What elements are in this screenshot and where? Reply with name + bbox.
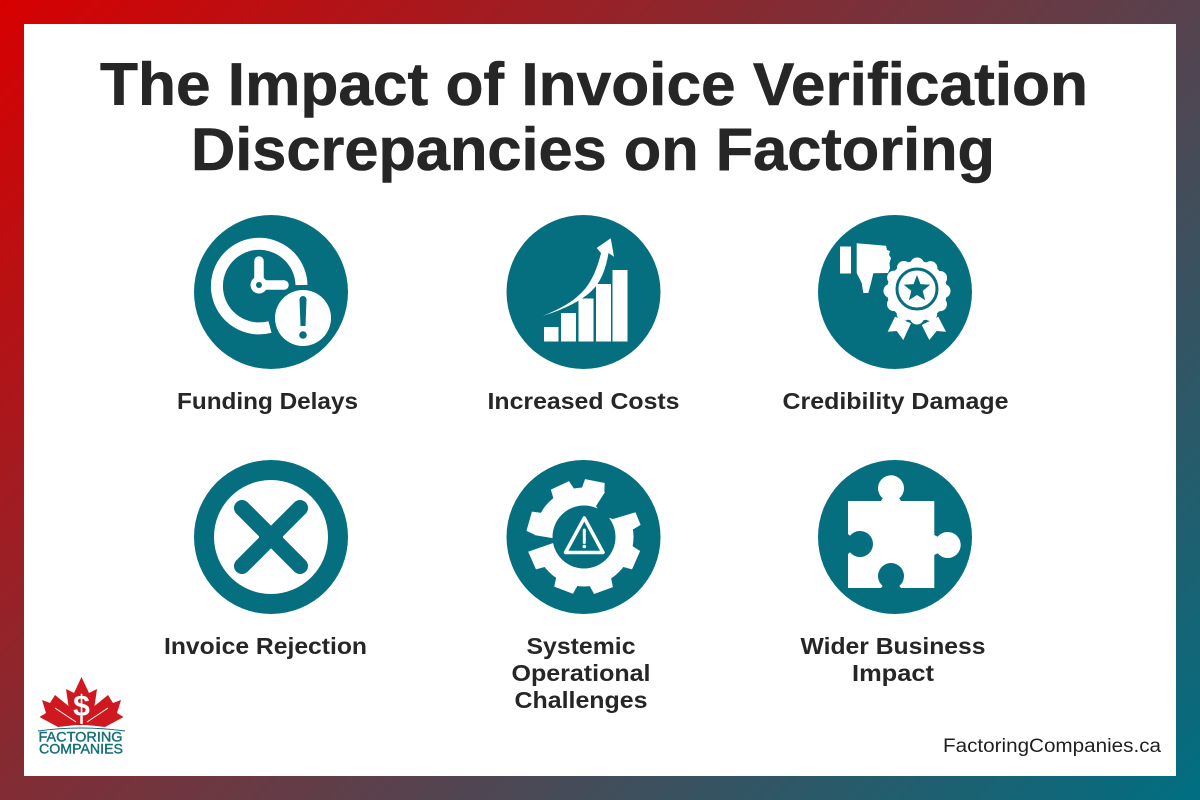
label: invoice rejection: Invoice Rejection (164, 633, 367, 659)
icon: credibility damage (818, 215, 972, 369)
icon: systemic operational gear (506, 460, 660, 614)
icon: funding delays clock (194, 215, 348, 369)
icon: wider business impact puzzle (818, 460, 972, 614)
label: credibility damage: Credibility Damage (782, 388, 1008, 414)
label: wider business impact: Wider Business (800, 633, 986, 659)
title (100, 51, 1088, 183)
logo wordmark: COMPANIES (39, 742, 123, 756)
label: systemic operational challenges: Systemic (526, 633, 636, 659)
logo wordmark: FACTORING (38, 730, 123, 744)
label: funding delays: Funding Delays (177, 388, 358, 414)
label: wider business impact (800, 633, 986, 686)
logo wordmark (38, 728, 125, 756)
label: systemic operational challenges (512, 633, 650, 713)
website url: FactoringCompanies.ca (943, 736, 1161, 757)
dollar sign: $ (73, 690, 90, 723)
label: systemic operational challenges: Challenges (514, 687, 648, 713)
title: Discrepancies on Factoring (191, 116, 995, 183)
icon: increased costs chart (506, 215, 660, 369)
title: The Impact of Invoice Verification (100, 51, 1088, 118)
label: systemic operational challenges: Operational (512, 660, 650, 686)
icon: invoice rejection x (194, 460, 348, 614)
logo: factoring companies (38, 677, 125, 756)
label: wider business impact: Impact (852, 660, 934, 686)
label: increased costs: Increased Costs (488, 388, 680, 414)
icon: maple leaf (40, 677, 124, 727)
